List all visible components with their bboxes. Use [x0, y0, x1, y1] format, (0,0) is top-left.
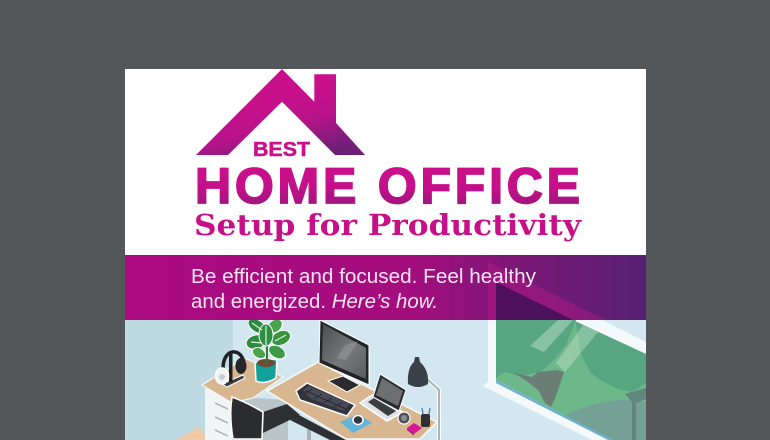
text block: intro: and energized. Here’s how. [191, 290, 438, 313]
tree trunk [514, 370, 564, 407]
desk top [202, 358, 437, 439]
heading: HOME OFFICE: HOME OFFICE [195, 158, 580, 214]
heading: BEST: BEST [253, 139, 310, 161]
purple band [125, 255, 646, 320]
desk frame and legs [263, 404, 346, 440]
pink box [407, 423, 422, 436]
window [483, 320, 646, 440]
drawer unit [205, 388, 288, 440]
icon: headphones on stand [216, 352, 246, 387]
hill [563, 400, 646, 440]
small tree [625, 388, 646, 440]
tree canopy left [496, 320, 576, 378]
illustration: home office room [125, 315, 646, 440]
keyboard [296, 383, 355, 416]
tree canopy right [576, 322, 646, 392]
speaker [398, 412, 410, 424]
panel: infographic card [125, 69, 646, 440]
heading: Setup for Productivity: Setup for Productivity [194, 208, 582, 242]
laptop [360, 374, 406, 421]
text block: intro [191, 265, 537, 313]
icon: potted plant [245, 315, 293, 382]
desk lamp [408, 357, 439, 440]
mouse pad and mouse [340, 414, 372, 433]
chair [231, 397, 263, 439]
icon: house roof with chimney [196, 69, 365, 155]
light beams [530, 320, 573, 352]
monitor [319, 320, 369, 392]
text block: intro: Be efficient and focused. Feel healthy [191, 265, 537, 288]
pen cup [421, 407, 430, 427]
